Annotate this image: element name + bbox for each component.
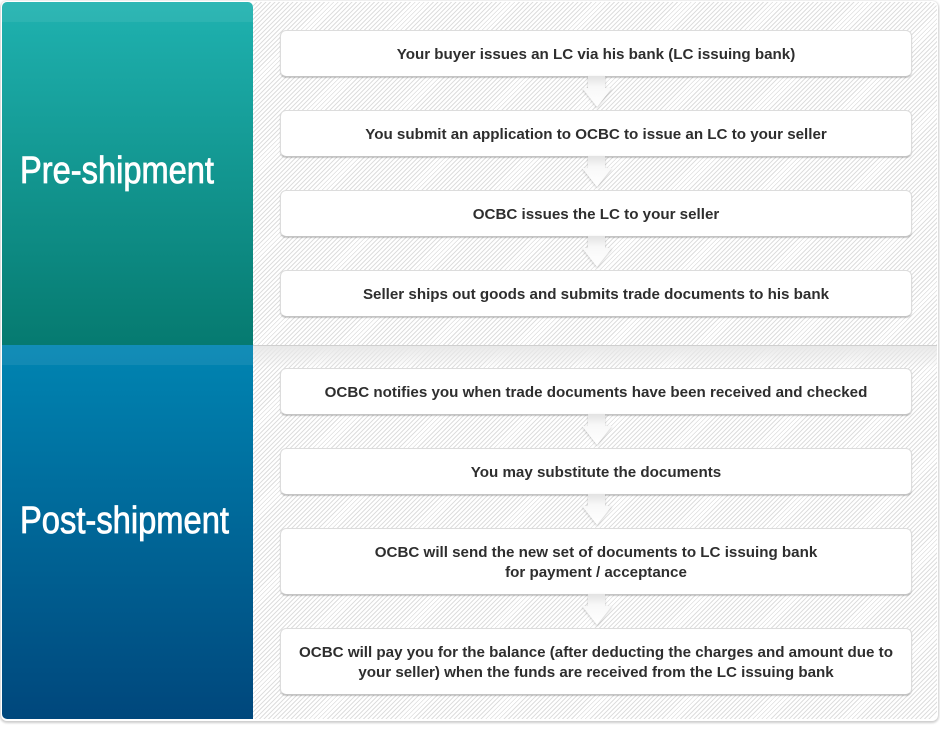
step: buyer issues LC: Your buyer issues an LC via his bank (LC issuing bank) [397,46,795,63]
heading: Pre-shipment: Pre-shipment [20,150,214,192]
panel: pre-shipment heading block [2,2,253,345]
step: OCBC issues LC [280,190,912,237]
arrow: step 2 to 3 [582,156,612,188]
arrow: step 3 to 4 [582,236,612,268]
step: substitute documents [280,448,912,495]
step: OCBC notifies [280,368,912,415]
arrow: step 7 to 8 [582,594,612,626]
step: send new documents: for payment / acceptance [505,564,687,581]
step: buyer issues LC [280,30,912,77]
arrow: step 6 to 7 [582,494,612,526]
step: application to OCBC: You submit an application to OCBC to issue an LC to your seller [365,126,827,143]
step: seller ships goods [280,270,912,317]
step: OCBC notifies: OCBC notifies you when trade documents have been received and checked [325,384,867,401]
step: application to OCBC [280,110,912,157]
arrow: step 1 to 2 [582,76,612,108]
arrow: step 5 to 6 [582,414,612,446]
step: OCBC pays balance: OCBC will pay you for the balance (after deducting the charges and amount due to [299,644,893,661]
step: substitute documents: You may substitute the documents [471,464,721,481]
step: OCBC pays balance [280,628,912,695]
step: seller ships goods: Seller ships out goods and submits trade documents to his bank [363,286,829,303]
step: send new documents [280,528,912,595]
step: OCBC pays balance: your seller) when the funds are received from the LC issuing bank [358,664,834,681]
step: OCBC issues LC: OCBC issues the LC to your seller [473,206,719,223]
step: send new documents: OCBC will send the new set of documents to LC issuing bank [375,544,817,561]
panel: post-shipment heading block [2,345,253,719]
